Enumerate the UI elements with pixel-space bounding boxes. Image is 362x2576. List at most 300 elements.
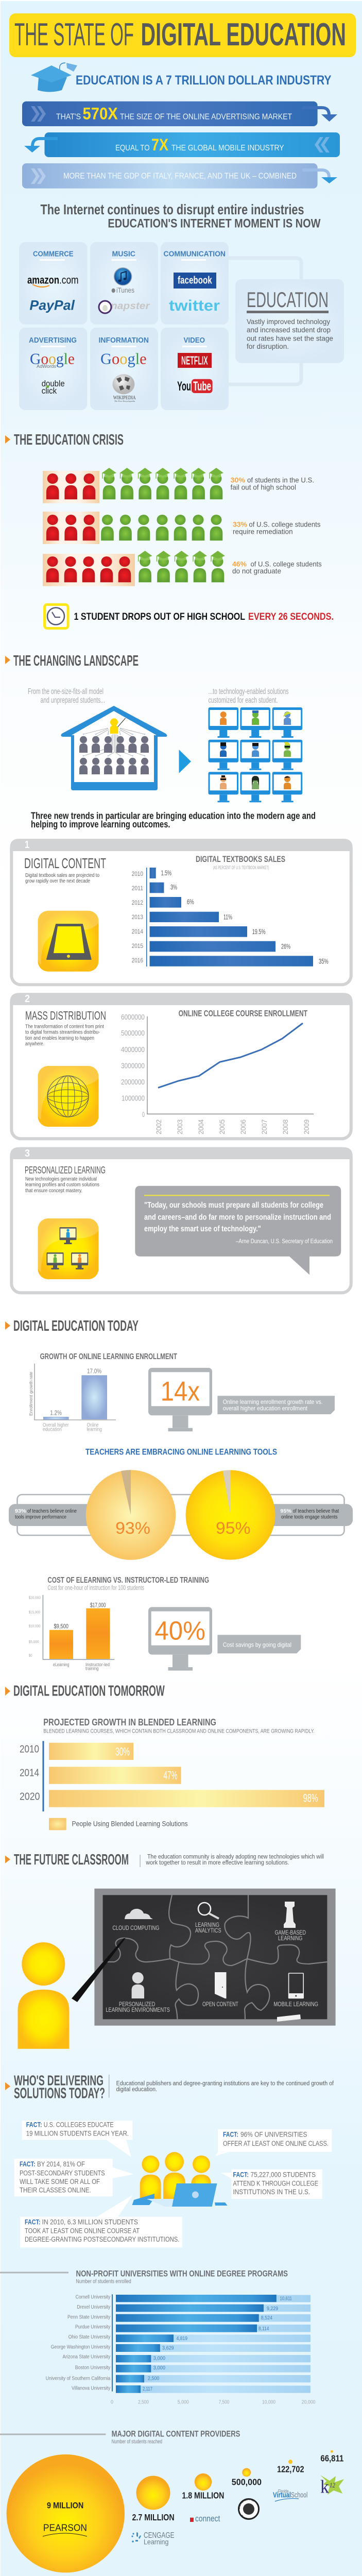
panel: commerce: COMMERCE	[33, 250, 74, 259]
bar chart: growth of online learning enrollment: 17.0%	[87, 1367, 101, 1375]
bar chart: growth of online learning enrollment	[29, 1352, 177, 1433]
tile: learning analytics	[195, 1903, 221, 1934]
bar chart: digital textbook sales	[132, 854, 329, 967]
bar chart: projected growth in blended learning: PROJECTED GROWTH IN BLENDED LEARNING	[43, 1717, 216, 1727]
panel 1: digital content	[10, 839, 353, 985]
logo: YouTube: You	[177, 379, 191, 394]
chalk	[277, 2014, 301, 2022]
bubble: Pearson: 9 MILLION	[47, 2501, 83, 2510]
bubble: Pearson	[7, 2454, 125, 2572]
panel: education: out rates have set the stage	[247, 334, 333, 342]
section heading: who's delivering solutions today: SOLUTIONS TODAY?	[14, 2085, 105, 2102]
caption: one-size-fits-all: From the one-size-fits-all model	[28, 687, 104, 696]
puzzle piece lines	[103, 1895, 327, 2019]
line chart: online college enrollment: ONLINE COLLEGE COURSE ENROLLMENT	[179, 1009, 307, 1019]
label: growth rate comparison: overall higher education enrollment	[223, 1404, 308, 1412]
label: cost savings: Cost savings by going digital	[223, 1641, 291, 1649]
bar chart: non-profit universities: 20,000	[302, 2400, 316, 2405]
section heading: who's delivering solutions today	[5, 2073, 105, 2102]
fact callout: 19 million: 19 MILLION STUDENTS EACH YEAR.	[26, 2130, 129, 2138]
panel 2: mass distribution: The transformation of content from print	[25, 1024, 104, 1029]
bar chart: growth of online learning enrollment: Overall higher	[43, 1422, 69, 1428]
section heading: the future classroom: THE FUTURE CLASSROOM	[14, 1852, 129, 1868]
bubble: Connect: 1.8 MILLION	[182, 2490, 224, 2500]
line chart: online college enrollment: 2002	[154, 1120, 163, 1134]
pictogram row: 30% high school	[43, 468, 223, 503]
logo: Netflix: NETFLIX	[181, 354, 208, 367]
panel: music	[90, 242, 158, 325]
logo: doubleclick: double	[42, 379, 65, 388]
bar chart: non-profit universities: 2,500	[138, 2400, 149, 2405]
label: 95% engagement: 95%	[280, 1509, 291, 1514]
bubble chart: major digital content providers: MAJOR DIGITAL CONTENT PROVIDERS	[112, 2429, 240, 2438]
logo: amazon: amazon	[27, 275, 59, 286]
blackboard: technology puzzle	[94, 1889, 336, 2026]
logo: napster	[99, 301, 150, 313]
logo: twitter: twitter	[169, 297, 220, 314]
legend	[49, 1818, 188, 1830]
fact callout: 75 million students: ATTEND K THROUGH COLLEGE	[233, 2179, 318, 2187]
section heading: the changing landscape	[5, 653, 139, 669]
logo: Google AdWords: Google	[30, 350, 75, 368]
bar chart: growth of online learning enrollment: Online	[87, 1422, 99, 1428]
panel: education: Vastly improved technology	[247, 317, 330, 326]
bar chart: digital textbook sales: 2011	[132, 885, 143, 892]
fact callout: 6.3 million	[20, 2195, 182, 2247]
label: growth rate comparison: Online learning enrollment growth rate vs.	[223, 1398, 322, 1405]
section heading: digital education today: DIGITAL EDUCATION TODAY	[13, 1318, 139, 1334]
label: 95% engagement	[265, 1504, 353, 1526]
bar chart: cost of eLearning: Instructor-led	[85, 1662, 110, 1668]
label: 93% performance: 93%	[15, 1509, 26, 1514]
logo: Netflix	[178, 353, 212, 368]
tile: learning analytics: LEARNING	[195, 1921, 219, 1928]
bar chart: projected growth in blended learning: 2014	[20, 1767, 39, 1778]
arrow: bar 1 to bar 2	[302, 108, 337, 122]
bar chart: cost of eLearning: eLearning	[53, 1662, 69, 1668]
panel 1: digital content: DIGITAL CONTENT	[24, 855, 106, 871]
bar chart: non-profit universities: 10,611	[280, 2295, 292, 2301]
panel 2: mass distribution	[10, 993, 353, 1139]
logo: Google AdWords: AdWords	[37, 364, 56, 369]
bar chart: non-profit universities: Number of students enrolled	[76, 2278, 131, 2284]
bubble: University of Phoenix: 500,000	[232, 2477, 262, 2487]
connector lines to education panel	[229, 258, 301, 384]
bar chart: digital textbook sales: (AS PERCENT OF U.S. TEXTBOOK MARKET)	[213, 865, 269, 871]
bar: 570X online advertising: 570X	[82, 105, 118, 123]
pie: 95%	[185, 1470, 275, 1560]
line chart: online college enrollment: 0	[142, 1111, 145, 1119]
illustration: traditional classroom house	[61, 706, 167, 790]
heading: teachers are embracing: TEACHERS ARE EMBRACING ONLINE LEARNING TOOLS	[85, 1447, 277, 1456]
line chart: online college enrollment: 2000000	[121, 1078, 145, 1087]
panel 3: personalized learning: that ensure concept mastery.	[25, 1188, 82, 1194]
logo: napster: napster	[111, 301, 150, 312]
line chart: online college enrollment: 2003	[176, 1120, 184, 1134]
logo: iTunes	[112, 268, 134, 294]
icon: clock	[44, 605, 68, 629]
section heading: who's delivering solutions today: WHO'S DELIVERING	[14, 2073, 104, 2089]
value bars	[116, 2295, 277, 2393]
line chart: online college enrollment: 2008	[281, 1120, 289, 1134]
bar chart: non-profit universities: 8,114	[258, 2326, 269, 2332]
bar chart: non-profit universities: 3,000	[153, 2355, 165, 2362]
bubble: Florida Virtual School: 122,702	[277, 2464, 304, 2475]
arrow: bar 3 down	[302, 170, 337, 183]
bar: 7X global mobile: THE GLOBAL MOBILE INDUSTRY	[171, 144, 284, 152]
tile: personalized learning environments: PERSONALIZED	[119, 2001, 156, 2008]
logo: facebook	[174, 273, 216, 289]
label: 93% performance: tools improve performance	[15, 1514, 66, 1520]
bar chart: non-profit universities: Boston University	[75, 2364, 111, 2370]
text: future classroom intro: The education community is already adopting new technologies which will	[147, 1854, 324, 1860]
bar chart: projected growth in blended learning	[20, 1717, 324, 1830]
illustration: students around laptop	[132, 2152, 228, 2207]
bar: GDP comparison	[22, 163, 318, 189]
panel 3: personalized learning: 3	[25, 1148, 30, 1159]
section heading: digital education tomorrow	[5, 1683, 165, 1700]
bar chart: non-profit universities: 2,500	[148, 2376, 160, 2382]
stat text: 30%: 30%	[231, 476, 246, 484]
bar chart: non-profit universities: 0	[111, 2400, 113, 2405]
tile: open content	[202, 1972, 238, 2008]
bar chart: cost of eLearning: $0	[29, 1653, 32, 1658]
teacher's pointer	[72, 1938, 126, 2002]
fact callout: 75 million students: INSTITUTIONS IN THE U.S.	[233, 2188, 310, 2196]
tile: personalized learning environments: LEARNING ENVIRONMENTS	[106, 2006, 170, 2013]
bar chart: non-profit universities: NON-PROFIT UNIVERSITIES WITH ONLINE DEGREE PROGRAMS	[76, 2269, 288, 2278]
bar chart: digital textbook sales: 19.5%	[252, 927, 266, 936]
logo: Google: Google	[100, 350, 147, 368]
teacher	[110, 718, 126, 734]
fact callout: 81% online: THEIR CLASSES ONLINE.	[20, 2187, 91, 2194]
bubble: Florida Virtual School	[273, 2460, 307, 2501]
bar chart: non-profit universities: 4,819	[177, 2335, 187, 2342]
bubble: Cengage: Learning	[144, 2537, 168, 2546]
section heading: digital education today	[5, 1318, 139, 1334]
intro text: three new trends: helping to improve learning outcomes.	[31, 819, 170, 829]
bar chart: non-profit universities: Penn State University	[67, 2314, 111, 2320]
title banner: THE STATE OF	[14, 17, 134, 53]
caption: technology-enabled: ...to technology-enabled solutions	[208, 687, 289, 696]
logo: YouTube	[177, 379, 213, 394]
panel: information	[90, 328, 158, 410]
bubble: Connect: connect	[195, 2514, 220, 2523]
bar chart: digital textbook sales: 2015	[132, 942, 143, 950]
pie comparison: teacher attitudes	[9, 1470, 353, 1560]
stat text: 33%	[233, 520, 320, 536]
bar chart: growth of online learning enrollment: 1.2%	[50, 1409, 62, 1417]
bar chart: cost of eLearning: training	[85, 1666, 99, 1672]
bubble: Florida Virtual School: School	[291, 2491, 307, 2500]
bubble: University of Phoenix: PHOENIX	[242, 2515, 251, 2520]
bar chart: cost of eLearning: $10,000	[29, 1623, 41, 1628]
bar chart: non-profit universities: 9,229	[267, 2306, 278, 2312]
fact callout: 75 million students: 75,227,000 STUDENTS	[250, 2171, 316, 2178]
label: cost savings	[217, 1635, 301, 1653]
tile: game-based learning: LEARNING	[278, 1935, 302, 1942]
pie: 93%: 93%	[115, 1519, 150, 1537]
text: who's delivering intro: digital education.	[116, 2087, 157, 2093]
fact callout: 81% online: FACT:	[20, 2160, 36, 2168]
icon: globe	[38, 1066, 99, 1127]
bar: 7X global mobile	[44, 132, 340, 157]
bar chart: digital textbook sales: 2013	[132, 913, 143, 921]
section heading: the changing landscape: THE CHANGING LANDSCAPE	[13, 653, 139, 669]
bar chart: cost of eLearning	[29, 1576, 209, 1672]
stat: 40% monitor: 40%	[154, 1616, 205, 1646]
line chart: online college enrollment: 6000000	[121, 1013, 145, 1022]
label: 95% engagement: online tools engage students	[281, 1514, 338, 1520]
label: 93% performance	[9, 1504, 96, 1526]
logo: facebook: facebook	[178, 275, 212, 286]
stat text: 30%: of students in the U.S.	[247, 476, 314, 484]
bar chart: non-profit universities: 3,000	[153, 2365, 165, 2371]
bar chart: non-profit universities: Villanova University	[72, 2385, 111, 2391]
bar chart: digital textbook sales: 35%	[319, 957, 329, 965]
logo: YouTube: Tube	[193, 379, 211, 394]
line chart: online college enrollment: 2005	[218, 1120, 226, 1134]
bubble: Florida Virtual School: Florida	[278, 2488, 288, 2494]
illustration: yellow teacher figure	[18, 1942, 69, 2049]
fact callout: 81% online	[14, 2159, 134, 2196]
fact callout: 96% of universities: OFFER AT LEAST ONE ONLINE CLASS.	[223, 2140, 329, 2147]
bar chart: cost of eLearning: Cost for one-hour of instruction for 100 students	[47, 1584, 144, 1591]
quote bubble	[135, 1186, 341, 1275]
bubble: Connect	[182, 2473, 224, 2523]
icon: networked monitors	[38, 1218, 99, 1279]
fact callout: 81% online: WILL TAKE SOME OR ALL OF	[20, 2178, 100, 2185]
fact callout: 96% of universities: FACT:	[223, 2131, 238, 2139]
section heading: digital education tomorrow: DIGITAL EDUCATION TOMORROW	[13, 1683, 165, 1700]
line chart: online college enrollment	[121, 1009, 314, 1134]
fact callout: 96% of universities: 96% OF UNIVERSITIES	[240, 2131, 307, 2139]
logo: Wikipedia	[112, 374, 136, 402]
bar: 7X global mobile: 7X	[151, 135, 169, 154]
stat text: 46%: 46%	[232, 560, 247, 568]
bubble: Cengage	[131, 2476, 175, 2546]
text: future classroom intro: work together to result in more effective learning solutions.	[145, 1860, 289, 1866]
line chart: online college enrollment: 2004	[197, 1120, 205, 1134]
stat text: 30%	[231, 476, 314, 492]
wires from teacher to students	[83, 728, 145, 756]
bubble chart: major digital content providers	[0, 2429, 344, 2573]
stat: 40% monitor	[148, 1607, 301, 1671]
section heading: the education crisis: THE EDUCATION CRISIS	[14, 432, 124, 448]
bubble: K12	[320, 2450, 344, 2497]
bubble: K12: 66,811	[320, 2453, 344, 2463]
logo: doubleclick	[42, 379, 65, 396]
bar chart: non-profit universities: Drexel University	[77, 2304, 111, 2310]
tile: mobile learning: MOBILE LEARNING	[273, 2001, 318, 2008]
panel: communication: COMMUNICATION	[164, 250, 226, 259]
bar chart: non-profit universities: Purdue University	[75, 2324, 111, 2330]
bubble: K12: k	[320, 2476, 329, 2497]
bar chart: digital textbook sales: 11%	[223, 913, 232, 921]
bar chart: non-profit universities: 3,629	[162, 2345, 174, 2351]
bubble: University of Phoenix: UNIVERSITY OF	[239, 2500, 254, 2509]
bar chart: digital textbook sales: 2016	[132, 957, 143, 964]
callout: dropout rate: 1 STUDENT DROPS OUT OF HIGH SCHOOL	[74, 611, 245, 622]
section heading: the future classroom	[5, 1852, 129, 1868]
bar chart: non-profit universities: 8,524	[261, 2315, 272, 2321]
icon: tablet	[38, 911, 99, 972]
panel 3: personalized learning	[10, 1147, 353, 1293]
bar: 7X global mobile: EQUAL TO	[115, 144, 150, 152]
bar chart: digital textbook sales: 2012	[132, 899, 143, 906]
arrow: from classroom to screens	[179, 750, 191, 773]
bar chart: cost of eLearning: $20,000	[29, 1595, 41, 1600]
bar chart: growth of online learning enrollment: education	[43, 1427, 62, 1433]
fact callout: 75 million students: FACT:	[233, 2171, 249, 2178]
tile: cloud computing: CLOUD COMPUTING	[112, 1924, 159, 1931]
fact callout: 81% online: POST-SECONDARY STUDENTS	[20, 2169, 105, 2177]
panel: commerce	[19, 242, 88, 325]
panel 2: mass distribution: MASS DISTRIBUTION	[25, 1009, 106, 1022]
line chart: online college enrollment: 2007	[260, 1120, 268, 1134]
bar chart: cost of eLearning: $9,500	[54, 1624, 68, 1630]
pie: 93%	[86, 1470, 176, 1560]
fact callout: 19 million: FACT:	[26, 2121, 42, 2128]
bar chart: non-profit universities: 5,000	[178, 2400, 189, 2405]
tile: personalized learning environments	[106, 1972, 170, 2013]
bar chart: non-profit universities: 7,500	[219, 2400, 230, 2405]
panel 1: digital content: grow rapidly over the next decade	[25, 878, 90, 884]
bar chart: cost of eLearning: $15,000	[29, 1610, 40, 1615]
fact callout: 75 million students	[220, 2170, 322, 2199]
fact callout: 81% online: BY 2014, 81% OF	[37, 2160, 85, 2168]
statement: internet disruption	[40, 201, 321, 231]
icon: graduation cap	[31, 63, 77, 92]
bar chart: non-profit universities: University of Southern California	[46, 2376, 110, 2382]
panel: education	[235, 279, 344, 363]
bar chart: digital textbook sales: DIGITAL TEXTBOOKS SALES	[196, 854, 285, 864]
panel: video: VIDEO	[183, 336, 205, 345]
fact callout: 6.3 million: IN 2010, 6.3 MILLION STUDENTS	[42, 2218, 138, 2226]
title banner	[9, 13, 356, 57]
tile: learning analytics: ANALYTICS	[195, 1927, 221, 1934]
bar chart: digital textbook sales: 3%	[170, 883, 177, 891]
panel 2: mass distribution: 2	[25, 993, 30, 1005]
panel: video	[161, 328, 229, 410]
bar chart: non-profit universities: 2,117	[143, 2386, 152, 2392]
text: who's delivering intro	[109, 2075, 334, 2098]
bar chart: digital textbook sales: 2014	[132, 928, 143, 935]
text: future classroom intro	[140, 1854, 324, 1867]
bar chart: growth of online learning enrollment: Enrollment growth rate	[29, 1371, 33, 1416]
bar chart: non-profit universities: Ohio State University	[68, 2334, 111, 2340]
tile: open content: OPEN CONTENT	[202, 2001, 238, 2008]
bar chart: projected growth in blended learning: 47%	[164, 1769, 177, 1782]
illustration: personalized screens grid	[208, 707, 302, 802]
caption: one-size-fits-all: and unprepared students...	[40, 696, 105, 705]
tile: mobile learning	[273, 1973, 318, 2008]
label: growth rate comparison	[217, 1396, 335, 1414]
bar chart: growth of online learning enrollment: learning	[87, 1427, 102, 1433]
stat text: 46%: do not graduate	[232, 567, 281, 575]
line chart: online college enrollment: 5000000	[121, 1029, 145, 1038]
bar chart: cost of eLearning: COST OF ELEARNING VS. INSTRUCTOR-LED TRAINING	[47, 1576, 209, 1585]
pie: 95%: 95%	[216, 1519, 250, 1537]
line chart: online college enrollment: 3000000	[121, 1062, 145, 1071]
stat text: 33%: 33%	[233, 520, 248, 529]
pictogram row: 33% remediation	[43, 512, 222, 544]
logo: iTunes: iTunes	[116, 286, 134, 294]
bar chart: growth of online learning enrollment: GROWTH OF ONLINE LEARNING ENROLLMENT	[40, 1352, 177, 1361]
bar chart: projected growth in blended learning: 2010	[20, 1744, 39, 1755]
panel: information: INFORMATION	[99, 336, 149, 345]
stat: 14x monitor	[148, 1368, 335, 1431]
panel: education: and increased student drop	[247, 326, 331, 334]
panel: education: for disruption.	[247, 342, 289, 350]
bar chart: non-profit universities	[0, 2269, 316, 2405]
panel 3: personalized learning: New technologies generate individual	[25, 1176, 97, 1182]
tile: game-based learning: GAME-BASED	[275, 1929, 306, 1936]
bar chart: cost of eLearning: $5,000	[29, 1639, 39, 1644]
stat text: 33%: of U.S. college students	[249, 520, 320, 529]
stat text: 46%: of U.S. college students	[250, 560, 322, 568]
statement: internet disruption: EDUCATION'S INTERNET MOMENT IS NOW	[108, 217, 321, 231]
section heading: the education crisis	[5, 432, 124, 448]
panel 2: mass distribution: tion and enables learning to happen	[25, 1036, 94, 1041]
tile: cloud computing	[112, 1909, 159, 1931]
background bars	[116, 2295, 311, 2393]
bubble: Cengage: CENGAGE	[144, 2531, 175, 2540]
logo: Wikipedia: WIKIPEDIA	[113, 395, 136, 401]
panel: advertising: ADVERTISING	[29, 336, 77, 345]
panel 1: digital content: 1	[25, 839, 29, 851]
panel 3: personalized learning: learning profiles and custom solutions	[25, 1182, 99, 1188]
stat: 14x monitor: 14x	[161, 1376, 200, 1406]
arrow: bar 2 to bar 3	[24, 139, 58, 152]
students	[79, 736, 149, 774]
label: 93% performance: of teachers believe online	[27, 1509, 77, 1514]
bar: 570X online advertising	[22, 101, 318, 126]
line chart: online college enrollment: 2009	[302, 1120, 311, 1134]
legend: People Using Blended Learning Solutions	[72, 1819, 188, 1827]
line chart: online college enrollment: 2006	[239, 1120, 247, 1134]
bar chart: non-profit universities: 10,000	[262, 2400, 275, 2405]
bar: GDP comparison: MORE THAN THE GDP OF ITALY, FRANCE, AND THE UK – COMBINED	[63, 172, 297, 181]
bar chart: digital textbook sales: 6%	[187, 897, 194, 906]
bar chart: projected growth in blended learning: 30%	[115, 1745, 130, 1758]
text: who's delivering intro: Educational publishers and degree-granting institutions are key to the continued growth of	[116, 2081, 334, 2087]
fact callout: 19 million	[22, 2121, 132, 2157]
logo: Wikipedia: The Free Encyclopedia	[114, 400, 135, 402]
pictogram row: 46% do not graduate	[43, 551, 225, 586]
bar chart: digital textbook sales: 2010	[132, 870, 143, 877]
stat text: 46%	[232, 560, 322, 575]
fact callout: 96% of universities	[215, 2129, 332, 2156]
intro text: three new trends	[31, 810, 316, 829]
bar: 570X online advertising: THE SIZE OF THE ONLINE ADVERTISING MARKET	[120, 113, 292, 122]
fact callout: 6.3 million: FACT:	[25, 2218, 40, 2226]
callout: dropout rate: EVERY 26 SECONDS.	[248, 611, 334, 622]
caption: technology-enabled: customized for each student.	[208, 696, 278, 705]
panel: communication	[161, 242, 229, 325]
bar: 570X online advertising: THAT'S	[56, 113, 81, 122]
caption: one-size-fits-all	[28, 687, 105, 705]
bar chart: projected growth in blended learning: 2020	[20, 1791, 40, 1802]
quote bubble: employ the smart use of technology."	[144, 1225, 261, 1233]
bubble: Pearson: PEARSON	[43, 2522, 87, 2533]
panel 2: mass distribution: to digital formats streamlines distribu-	[25, 1030, 100, 1036]
tile: game-based learning	[275, 1902, 306, 1942]
line chart: online college enrollment: 1000000	[122, 1095, 145, 1103]
caption: technology-enabled	[208, 687, 289, 705]
bar chart: digital textbook sales: 1.5%	[161, 869, 171, 877]
panel: advertising	[19, 328, 88, 410]
